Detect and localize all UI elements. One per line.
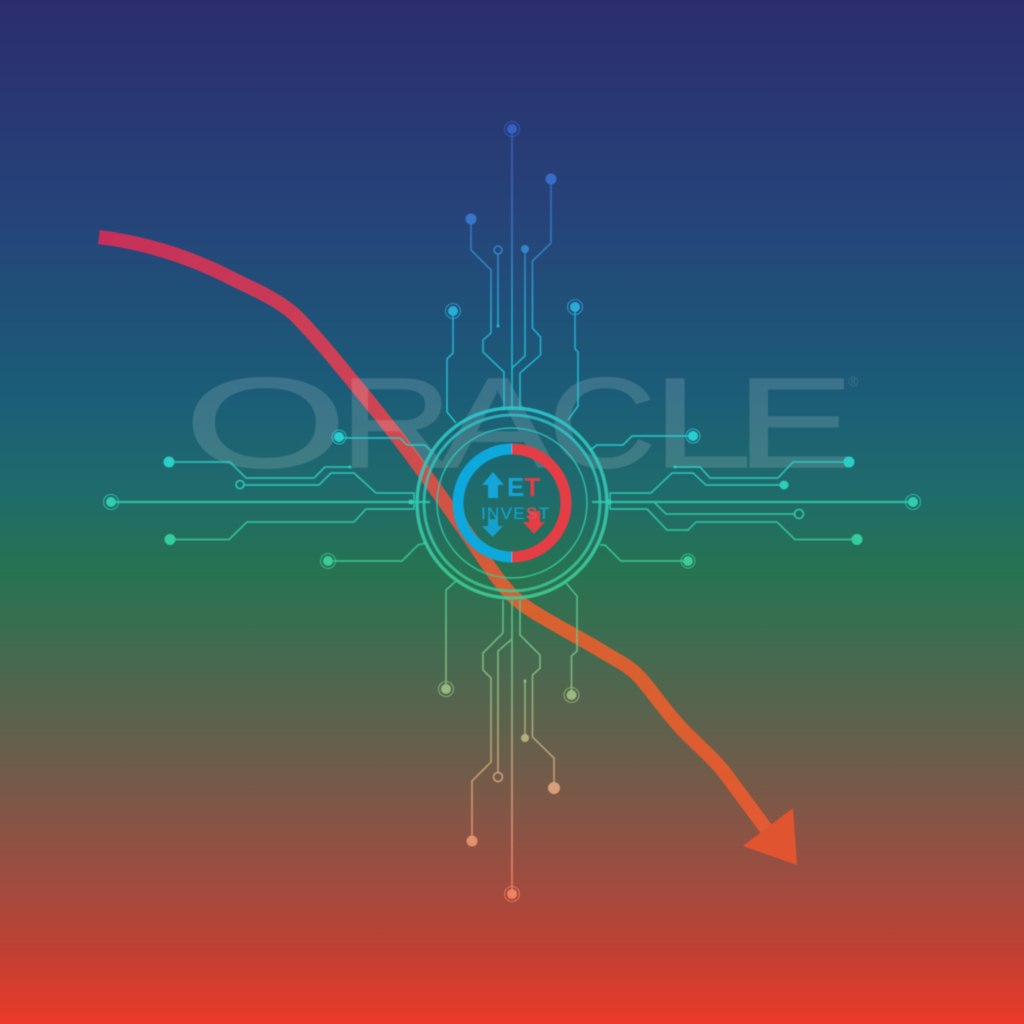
- split ring: red half: [512, 449, 566, 557]
- watermark: ORACLE wordmark: L: [652, 352, 752, 495]
- watermark: ORACLE wordmark: E: [736, 352, 854, 495]
- trend line: [99, 237, 770, 834]
- arrowhead: [743, 808, 797, 865]
- traces: bottom: [446, 581, 577, 890]
- downward trend arrow: [99, 237, 797, 865]
- watermark: ORACLE wordmark: O: [184, 352, 347, 495]
- traces: left: [111, 438, 431, 561]
- node group: ringed terminals: [104, 122, 920, 902]
- node group: hollow terminals: [236, 246, 804, 782]
- icon: blue up arrow: [482, 472, 504, 498]
- watermark: ORACLE wordmark: ®: [848, 373, 859, 389]
- split ring: blue half: [458, 449, 512, 557]
- watermark: ORACLE wordmark: R: [340, 352, 452, 495]
- central badge: [417, 408, 607, 598]
- label: ET: ET: [507, 472, 540, 502]
- watermark: ORACLE wordmark: C: [548, 352, 656, 495]
- watermark: ORACLE wordmark: [184, 352, 859, 495]
- circuit traces: [111, 134, 913, 890]
- watermark: ORACLE wordmark: A: [440, 352, 556, 495]
- node group: solid terminals: [164, 174, 862, 846]
- traces: right: [590, 436, 913, 561]
- concentric rings: [417, 408, 607, 598]
- icon: red down arrow: [523, 511, 545, 534]
- label: INVEST: INVEST: [481, 504, 549, 523]
- circuit nodes: [104, 122, 920, 902]
- traces: top: [447, 134, 578, 423]
- icon: blue down arrow: [482, 519, 503, 537]
